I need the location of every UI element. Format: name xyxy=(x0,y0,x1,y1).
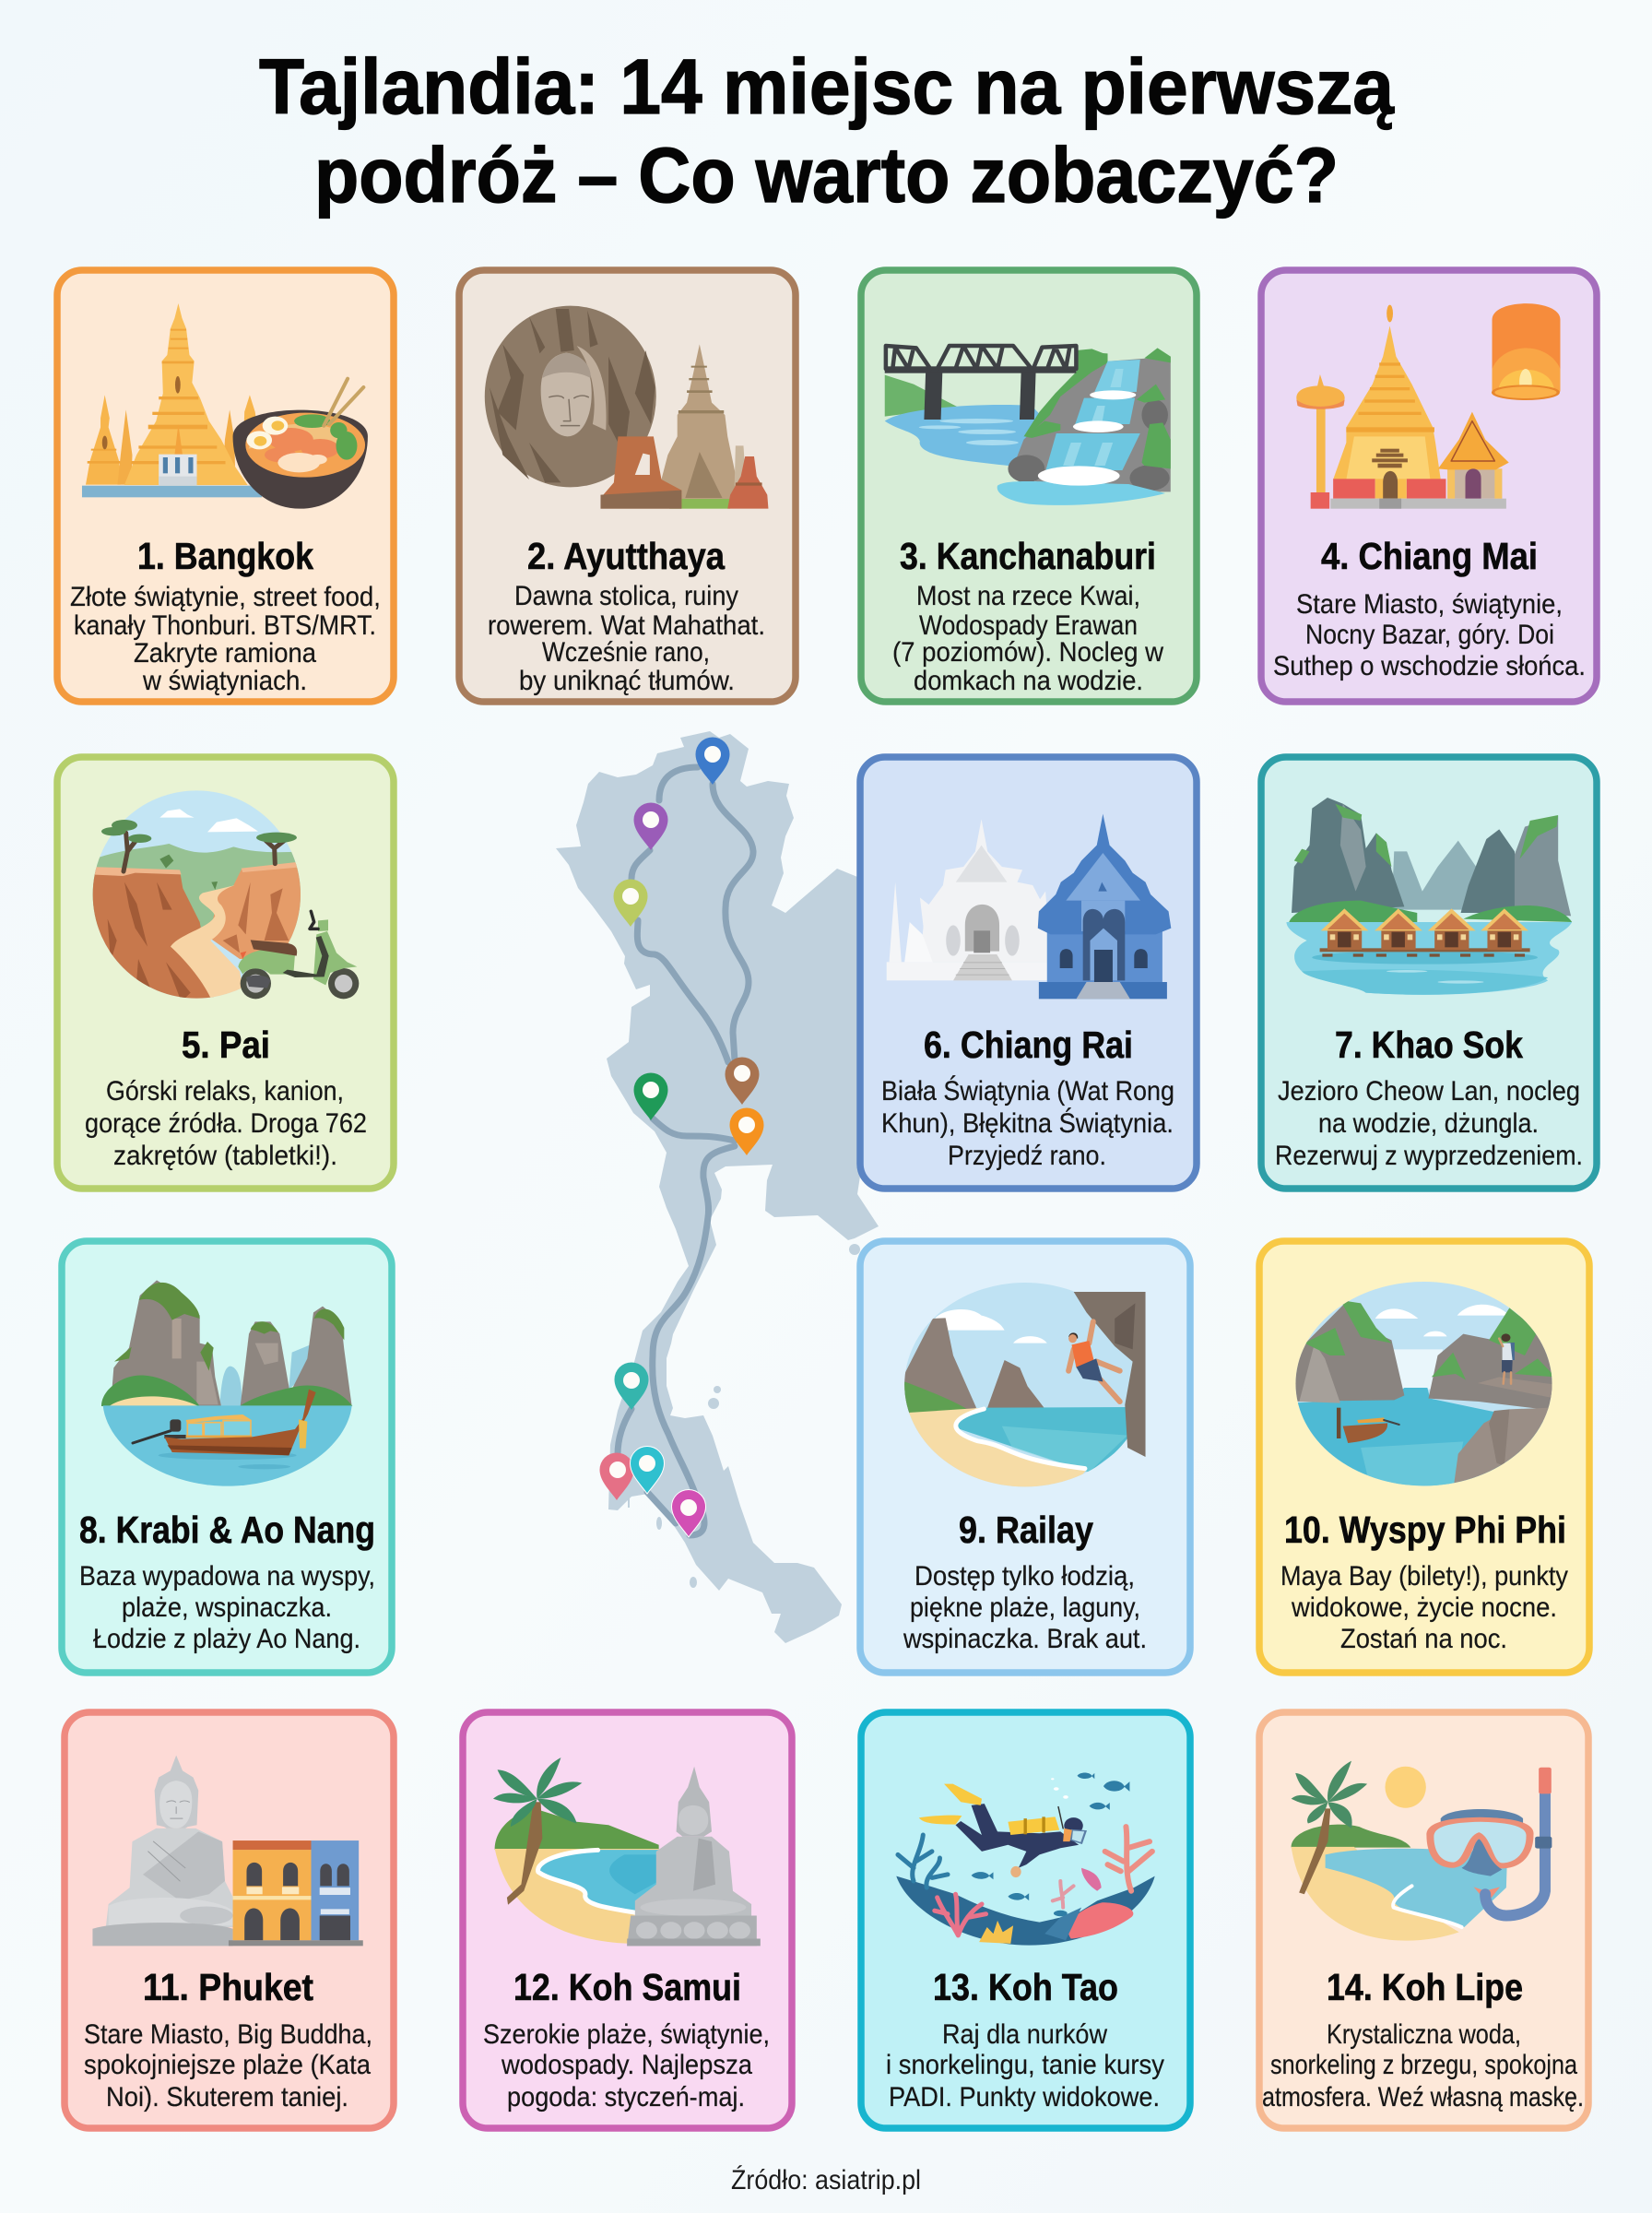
illustration: White and Blue temples xyxy=(887,814,1171,999)
description: Suthep o wschodzie słońca. xyxy=(1273,651,1586,681)
description: gorące źródła. Droga 762 xyxy=(85,1108,367,1139)
description: Dostęp tylko łodzią, xyxy=(914,1561,1135,1592)
description xyxy=(881,1075,1174,1171)
card frame xyxy=(57,270,394,702)
illustration: Wat Arun and noodle bowl xyxy=(82,303,368,509)
illustration: Maya Bay viewpoint xyxy=(1289,1279,1555,1491)
description xyxy=(1275,1076,1583,1171)
pin: Phuket xyxy=(599,1453,634,1500)
panel: 12. Koh Samui xyxy=(463,1712,792,2128)
description xyxy=(1262,2019,1584,2112)
description: Maya Bay (bilety!), punkty xyxy=(1280,1561,1568,1592)
description: Rezerwuj z wyprzedzeniem. xyxy=(1275,1141,1583,1171)
panel: 2. Ayutthaya xyxy=(459,270,796,702)
description: PADI. Punkty widokowe. xyxy=(889,2082,1160,2112)
panel: 7. Khao Sok xyxy=(1261,757,1597,1189)
panel: 5. Pai xyxy=(57,757,394,1189)
description: Raj dla nurków xyxy=(942,2019,1107,2050)
pin: Khao Sok xyxy=(614,1363,649,1410)
description: rowerem. Wat Mahathat. xyxy=(488,610,765,641)
heading: 3. Kanchanaburi xyxy=(900,535,1156,577)
illustration: limestone cliffs and longtail boat xyxy=(101,1280,352,1486)
pin centres xyxy=(609,746,755,1516)
card frame xyxy=(62,1241,392,1673)
description: piękne plaże, laguny, xyxy=(910,1592,1140,1623)
description: atmosfera. Weź własną maskę. xyxy=(1262,2082,1584,2112)
title: podróż – Co warto zobaczyć? xyxy=(314,132,1339,219)
description: by uniknąć tłumów. xyxy=(519,666,735,696)
illustration: Big Buddha and old town shophouses xyxy=(92,1756,363,1946)
heading: 9. Railay xyxy=(959,1509,1093,1551)
description: Noi). Skuterem taniej. xyxy=(106,2082,348,2112)
description: spokojniejsze plaże (Kata xyxy=(84,2050,371,2080)
pin: Bangkok xyxy=(730,1108,763,1155)
card frame xyxy=(860,1241,1190,1673)
description xyxy=(85,1076,367,1171)
panel: 13. Koh Tao xyxy=(861,1712,1190,2128)
panel: 1. Bangkok xyxy=(57,270,394,702)
card frame xyxy=(1261,757,1597,1189)
description: Stare Miasto, świątynie, xyxy=(1296,589,1563,620)
illustration: Buddha head in tree roots and ruins xyxy=(485,306,768,509)
description xyxy=(903,1561,1147,1654)
heading: 2. Ayutthaya xyxy=(527,535,726,577)
heading: 1. Bangkok xyxy=(137,535,313,577)
description: Nocny Bazar, góry. Doi xyxy=(1305,620,1554,650)
heading: 4. Chiang Mai xyxy=(1321,535,1538,577)
pin: Koh Samui xyxy=(671,1490,706,1537)
heading: 11. Phuket xyxy=(143,1966,313,2008)
heading: 13. Koh Tao xyxy=(933,1966,1118,2008)
panel: 6. Chiang Rai xyxy=(860,757,1197,1189)
card frame xyxy=(459,270,796,702)
description xyxy=(892,581,1163,696)
map of Thailand with route and pins xyxy=(556,731,885,1643)
title xyxy=(259,43,1395,219)
description: Stare Miasto, Big Buddha, xyxy=(84,2019,372,2050)
description xyxy=(84,2019,372,2112)
panel: 14. Koh Lipe xyxy=(1259,1712,1588,2128)
description xyxy=(79,1561,375,1654)
card frame xyxy=(463,1712,792,2128)
description: Wcześnie rano, xyxy=(542,637,710,668)
description: Łodzie z plaży Ao Nang. xyxy=(93,1624,360,1654)
description: Baza wypadowa na wyspy, xyxy=(79,1561,375,1592)
card frame xyxy=(1259,1712,1588,2128)
map landmass xyxy=(556,731,885,1643)
description: plaże, wspinaczka. xyxy=(122,1592,332,1623)
source credit: Źródło: asiatrip.pl xyxy=(731,2165,921,2195)
heading: 14. Koh Lipe xyxy=(1327,1966,1523,2008)
pin: Pai xyxy=(614,880,647,927)
illustration: karst lake with floating huts xyxy=(1286,798,1572,995)
description: Khun), Błękitna Świątynia. xyxy=(881,1107,1174,1139)
description: Dawna stolica, ruiny xyxy=(514,581,738,611)
panel: 4. Chiang Mai xyxy=(1261,270,1597,702)
illustration: diver and coral reef xyxy=(896,1772,1155,1946)
description: na wodzie, dżungla. xyxy=(1318,1108,1539,1139)
card frame xyxy=(57,757,394,1189)
description: widokowe, życie nocne. xyxy=(1291,1592,1557,1623)
description: Złote świątynie, street food, xyxy=(70,582,381,612)
description xyxy=(488,581,765,696)
card frame xyxy=(1261,270,1597,702)
illustration: climber over Railay beach xyxy=(900,1279,1150,1491)
description: Wodospady Erawan xyxy=(919,610,1138,641)
illustration: palm, beach and Buddha xyxy=(493,1757,761,1946)
description: Most na rzece Kwai, xyxy=(916,581,1140,611)
heading: 8. Krabi & Ao Nang xyxy=(79,1509,375,1551)
card frame xyxy=(860,757,1197,1189)
panel: 8. Krabi & Ao Nang xyxy=(62,1241,392,1673)
description: i snorkelingu, tanie kursy xyxy=(886,2050,1164,2080)
panel: 11. Phuket xyxy=(65,1712,394,2128)
illustration: canyon and scooter xyxy=(89,790,359,1005)
description: Górski relaks, kanion, xyxy=(106,1076,344,1106)
pin: Chiang Rai xyxy=(695,738,730,785)
description: snorkeling z brzegu, spokojna xyxy=(1270,2050,1577,2080)
description xyxy=(1280,1561,1568,1654)
heading: 10. Wyspy Phi Phi xyxy=(1284,1509,1566,1551)
description: kanały Thonburi. BTS/MRT. xyxy=(74,610,376,641)
panel: 10. Wyspy Phi Phi xyxy=(1259,1241,1589,1673)
description xyxy=(70,582,381,696)
heading: 5. Pai xyxy=(182,1024,270,1066)
pin: Ayutthaya xyxy=(725,1057,760,1105)
description xyxy=(886,2019,1164,2112)
description: Jezioro Cheow Lan, nocleg xyxy=(1278,1076,1580,1106)
description: w świątyniach. xyxy=(142,666,307,696)
pin: Kanchanaburi xyxy=(634,1073,667,1120)
description: Krystaliczna woda, xyxy=(1327,2019,1521,2050)
card frame xyxy=(861,1712,1190,2128)
description: wodospady. Najlepsza xyxy=(501,2050,752,2080)
heading: 6. Chiang Rai xyxy=(924,1024,1133,1066)
description: Przyjedź rano. xyxy=(948,1141,1106,1171)
panel: 9. Railay xyxy=(860,1241,1190,1673)
islands xyxy=(628,1244,860,1588)
description xyxy=(483,2019,770,2112)
pin: Chiang Mai xyxy=(634,802,667,850)
description: (7 poziomów). Nocleg w xyxy=(892,637,1163,668)
card frame xyxy=(65,1712,394,2128)
heading: 7. Khao Sok xyxy=(1335,1024,1523,1066)
illustration: Doi Suthep chedi and sky lantern xyxy=(1296,303,1560,509)
description: Biała Świątynia (Wat Rong xyxy=(881,1075,1174,1106)
heading: 12. Koh Samui xyxy=(513,1966,741,2008)
title: Tajlandia: 14 miejsc na pierwszą xyxy=(259,43,1395,130)
description: zakrętów (tabletki!). xyxy=(113,1141,337,1171)
description: wspinaczka. Brak aut. xyxy=(903,1624,1147,1654)
description: Szerokie plaże, świątynie, xyxy=(483,2019,770,2050)
card frame xyxy=(1259,1241,1589,1673)
illustration: beach, palm and snorkel mask xyxy=(1292,1761,1552,1941)
panel: 3. Kanchanaburi xyxy=(861,270,1197,702)
card frame xyxy=(861,270,1197,702)
route lines xyxy=(618,767,753,1535)
description: Zostań na noc. xyxy=(1340,1624,1507,1654)
description: domkach na wodzie. xyxy=(914,666,1143,696)
pin: Krabi xyxy=(631,1446,664,1494)
description: pogoda: styczeń-maj. xyxy=(507,2082,745,2112)
description: Zakryte ramiona xyxy=(134,638,316,669)
description xyxy=(1273,589,1586,681)
illustration: bridge on the Kwai and Erawan falls xyxy=(885,346,1171,505)
